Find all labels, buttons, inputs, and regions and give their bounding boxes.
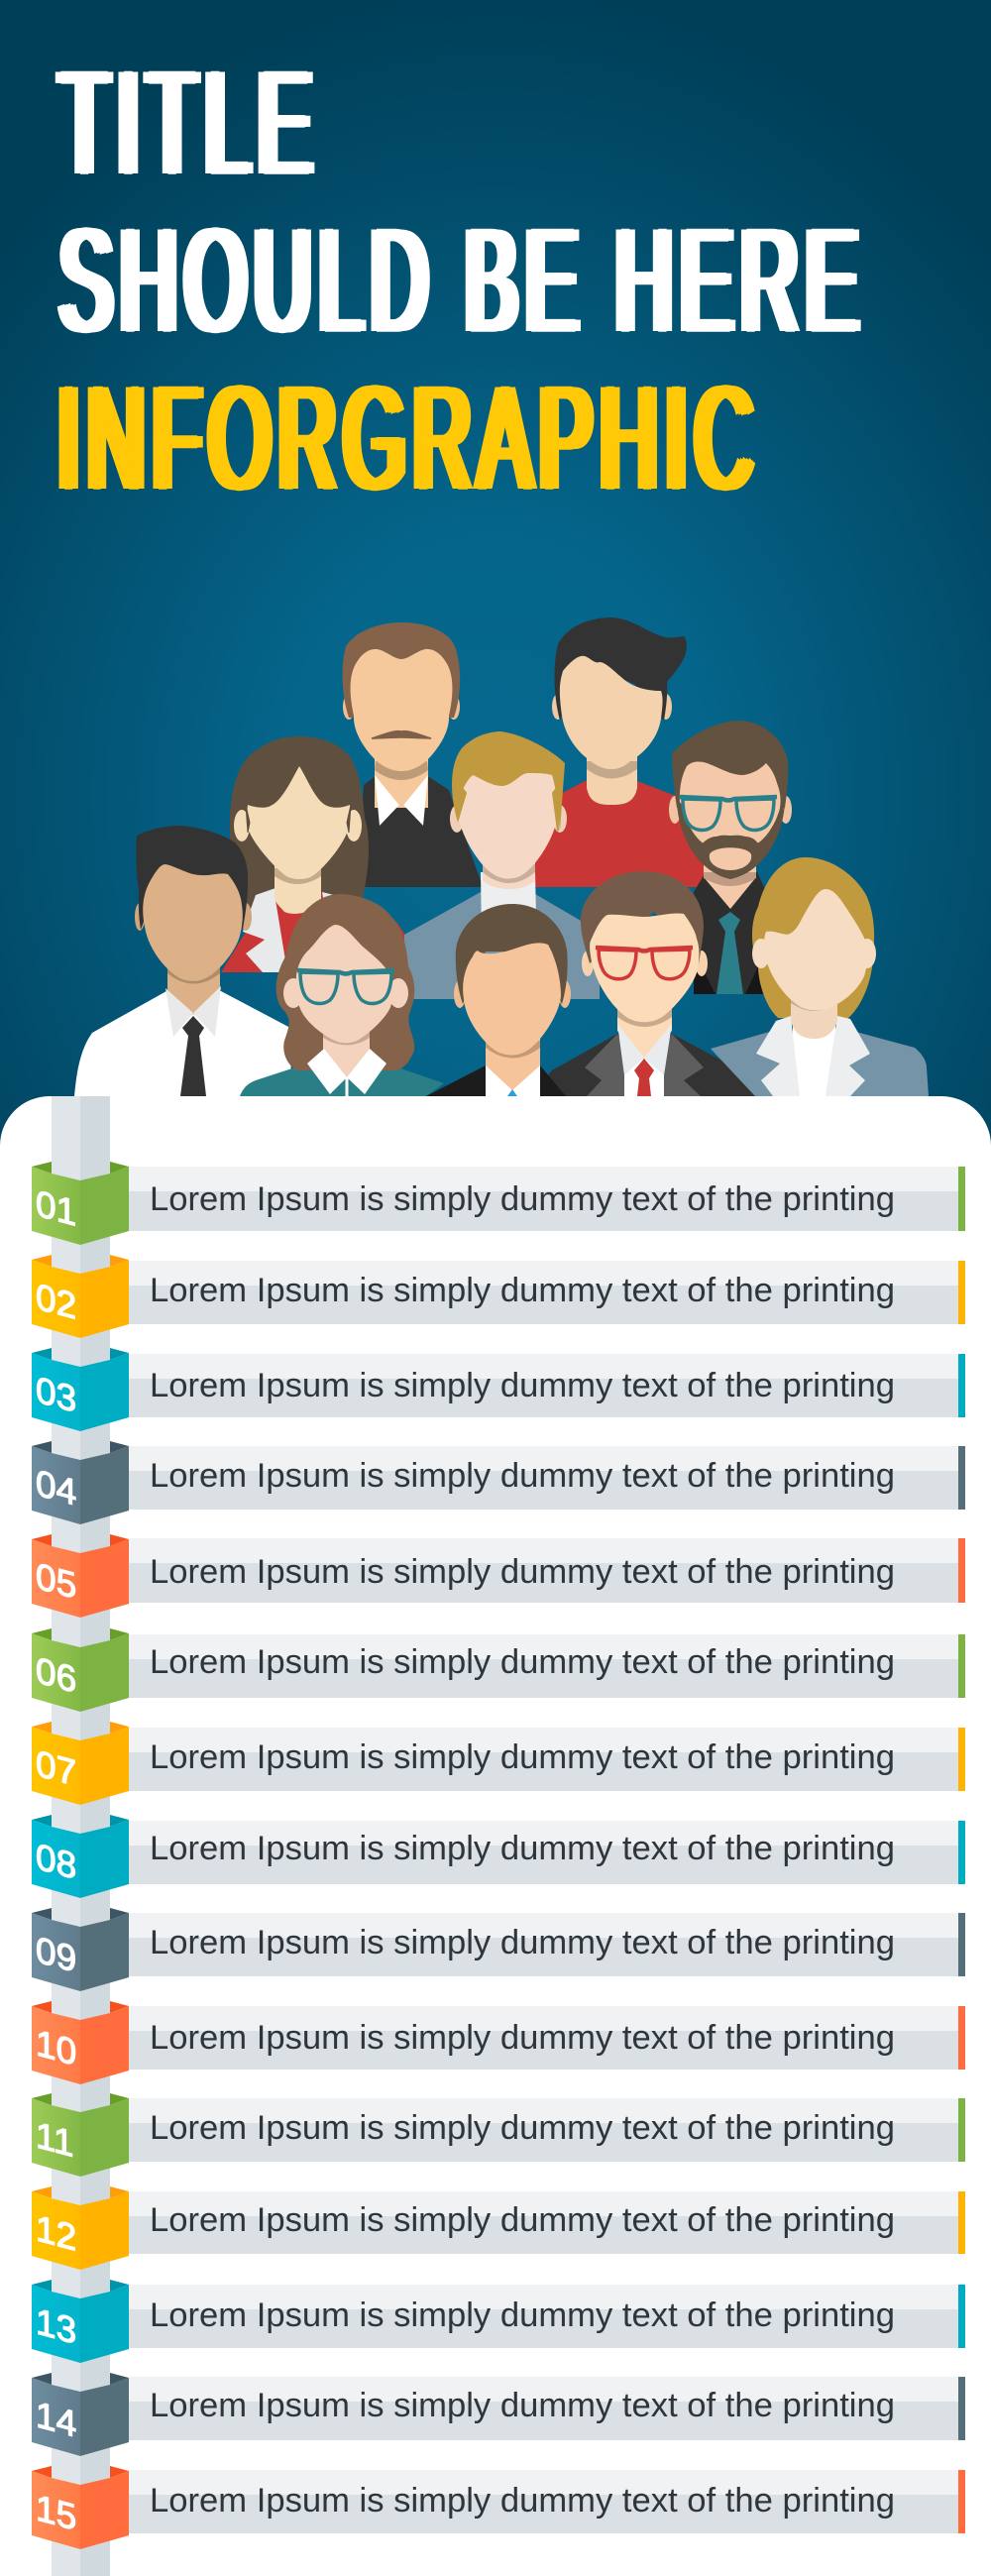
list row 11 [32, 2093, 965, 2177]
person: man with brown hair and black suit [426, 904, 571, 1096]
list row 03: Lorem Ipsum is simply dummy text of the printing [150, 1367, 895, 1404]
list row 07: Lorem Ipsum is simply dummy text of the printing [150, 1738, 895, 1776]
glasses [680, 797, 777, 830]
person: bearded man with teal glasses and tie [669, 721, 792, 994]
list row 05: Lorem Ipsum is simply dummy text of the printing [150, 1553, 895, 1591]
list row 10 [32, 2001, 965, 2084]
list row 14 [32, 2373, 965, 2456]
tie [180, 1016, 206, 1096]
list row 02 [32, 1255, 965, 1338]
list row 03: 03 [36, 1369, 76, 1420]
list row 05: 05 [36, 1555, 76, 1607]
list row 15: 15 [36, 2487, 76, 2538]
list row 11: 11 [36, 2114, 73, 2165]
list row 10: Lorem Ipsum is simply dummy text of the printing [150, 2019, 895, 2057]
person: blond man with slate jacket [404, 731, 600, 999]
tie [507, 1089, 517, 1096]
list row 14: Lorem Ipsum is simply dummy text of the printing [150, 2387, 895, 2424]
list row 08 [32, 1815, 965, 1898]
list row 09 [32, 1908, 965, 1991]
list row 06: 06 [36, 1649, 76, 1701]
list row 12: Lorem Ipsum is simply dummy text of the printing [150, 2201, 895, 2239]
list row 14: 14 [36, 2394, 76, 2445]
illustration: group of ten business people [74, 617, 929, 1096]
person: woman with glasses and teal blouse [240, 894, 444, 1096]
person: woman with brown hair and white jacket [221, 736, 406, 972]
person: man with red glasses and dark suit [530, 871, 755, 1096]
list row 12 [32, 2186, 965, 2270]
title [55, 40, 866, 520]
list row 05 [32, 1534, 965, 1618]
person: man with dark hair, white shirt and black tie [74, 826, 291, 1096]
list row 01: 01 [36, 1182, 76, 1234]
list row 13: Lorem Ipsum is simply dummy text of the printing [150, 2296, 895, 2334]
list row 15 [32, 2466, 965, 2549]
background: blue radial gradient header [0, 0, 991, 1150]
list row 02: Lorem Ipsum is simply dummy text of the printing [150, 1272, 895, 1309]
list row 08: 08 [36, 1836, 76, 1887]
title line: SHOULD BE HERE: SHOULD BE HERE [59, 197, 866, 363]
panel: white list card [0, 1096, 991, 2576]
list row 07: 07 [36, 1742, 76, 1794]
glasses [596, 948, 693, 979]
title line: TITLE: TITLE [59, 40, 320, 205]
list row 12: 12 [36, 2207, 76, 2259]
list row 10: 10 [36, 2022, 76, 2073]
list row 03 [32, 1348, 965, 1431]
list row 04: 04 [36, 1462, 76, 1513]
list row 08: Lorem Ipsum is simply dummy text of the printing [150, 1830, 895, 1867]
list row 06: Lorem Ipsum is simply dummy text of the printing [150, 1643, 895, 1681]
person: man with black hair and red shirt [525, 617, 706, 887]
tie [716, 912, 743, 994]
list row 01: Lorem Ipsum is simply dummy text of the printing [150, 1180, 895, 1218]
list row 02: 02 [36, 1276, 76, 1327]
list row 09: 09 [36, 1929, 76, 1980]
list row 04: Lorem Ipsum is simply dummy text of the printing [150, 1457, 895, 1495]
list row 07 [32, 1722, 965, 1805]
column: grey central pillar [52, 1096, 110, 2576]
person: man with moustache [343, 622, 483, 887]
list row 04 [32, 1441, 965, 1524]
list row 09: Lorem Ipsum is simply dummy text of the printing [150, 1924, 895, 1961]
list row 11: Lorem Ipsum is simply dummy text of the printing [150, 2109, 895, 2147]
glasses [297, 970, 394, 1003]
list row 13: 13 [36, 2300, 76, 2352]
list row 15: Lorem Ipsum is simply dummy text of the printing [150, 2482, 895, 2520]
person: blonde woman with slate blazer [711, 857, 929, 1096]
list row 06 [32, 1628, 965, 1712]
title line: INFORGRAPHIC: INFORGRAPHIC [57, 355, 760, 520]
tie [634, 1059, 654, 1096]
list row 01 [32, 1162, 965, 1245]
list row 13 [32, 2280, 965, 2363]
